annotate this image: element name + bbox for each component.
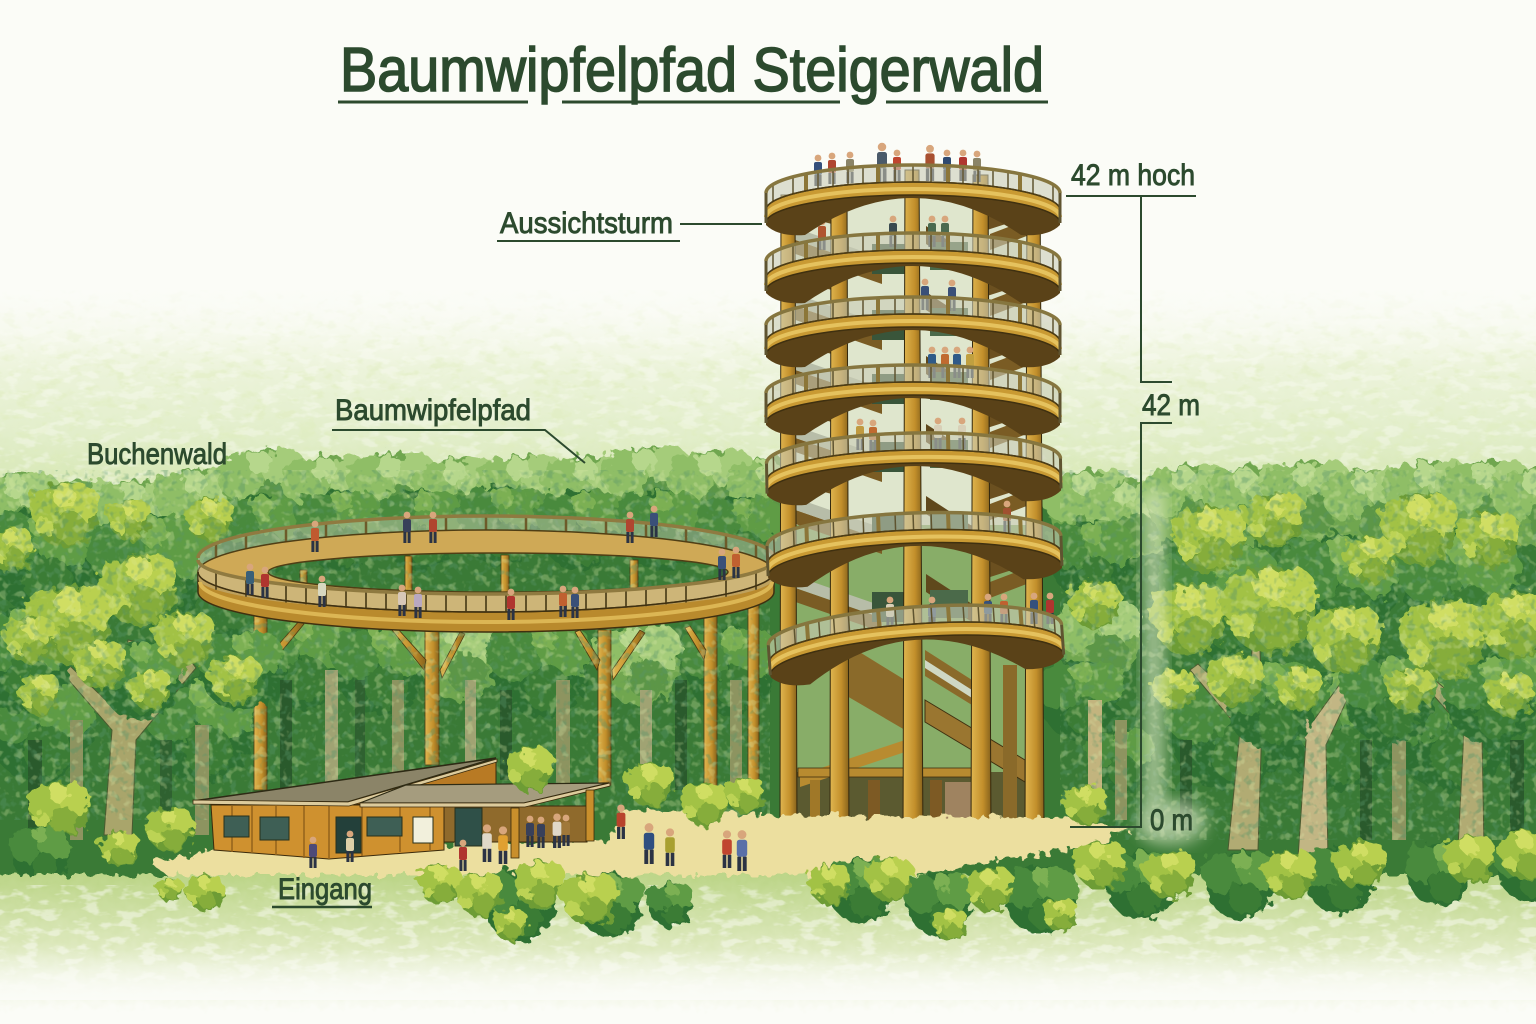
label: Baumwipfelpfad [332, 394, 585, 463]
foreground bushes [156, 831, 1536, 941]
label: Eingang: Eingang [278, 873, 372, 906]
pale vertical glow beside height scale [1138, 490, 1206, 844]
height scale [1066, 159, 1200, 837]
walkway support pillars [254, 555, 759, 790]
notice board [413, 817, 433, 843]
main roof [193, 758, 496, 802]
visitor centre building [193, 758, 610, 859]
front fascia [198, 572, 774, 632]
forest background [0, 446, 1536, 900]
label: Aussichtsturm: Aussichtsturm [500, 207, 673, 240]
height scale: 42 m [1142, 389, 1200, 422]
ground visitors [309, 804, 747, 871]
height scale: 0 m [1150, 804, 1193, 837]
bottom wash [0, 875, 1536, 1010]
building walls [211, 805, 444, 859]
walkway ring [198, 506, 774, 632]
tower rings [766, 165, 1065, 687]
deck with central opening [198, 530, 774, 612]
concrete footings [830, 823, 1042, 850]
title: Baumwipfelpfad Steigerwald [340, 36, 1044, 105]
canopy posts [511, 790, 594, 858]
background trunks [28, 670, 1524, 840]
left bright beech tree [0, 483, 283, 835]
entrance canopy roof [360, 783, 609, 803]
height scale: 42 m hoch [1071, 159, 1195, 192]
shrubs near path [9, 748, 1107, 883]
label: Aussichtsturm [497, 207, 762, 241]
label: Buchenwald: Buchenwald [87, 438, 227, 471]
leaf texture overlay [0, 470, 1536, 840]
observation tower [766, 143, 1065, 850]
visitors on walkway [246, 506, 740, 620]
label: Baumwipfelpfad: Baumwipfelpfad [335, 394, 531, 427]
back railing [198, 516, 774, 572]
pale green haze behind forest [0, 280, 1536, 500]
entrance gable wall [348, 760, 496, 805]
tower interior [783, 195, 1041, 832]
right bright beech trees [1149, 492, 1536, 858]
front railing [198, 560, 774, 622]
visitors on tower [814, 143, 1054, 628]
windows and door [224, 808, 482, 853]
tower columns [780, 170, 1044, 840]
covered entrance back wall [444, 806, 587, 842]
sandy path [150, 810, 1130, 895]
